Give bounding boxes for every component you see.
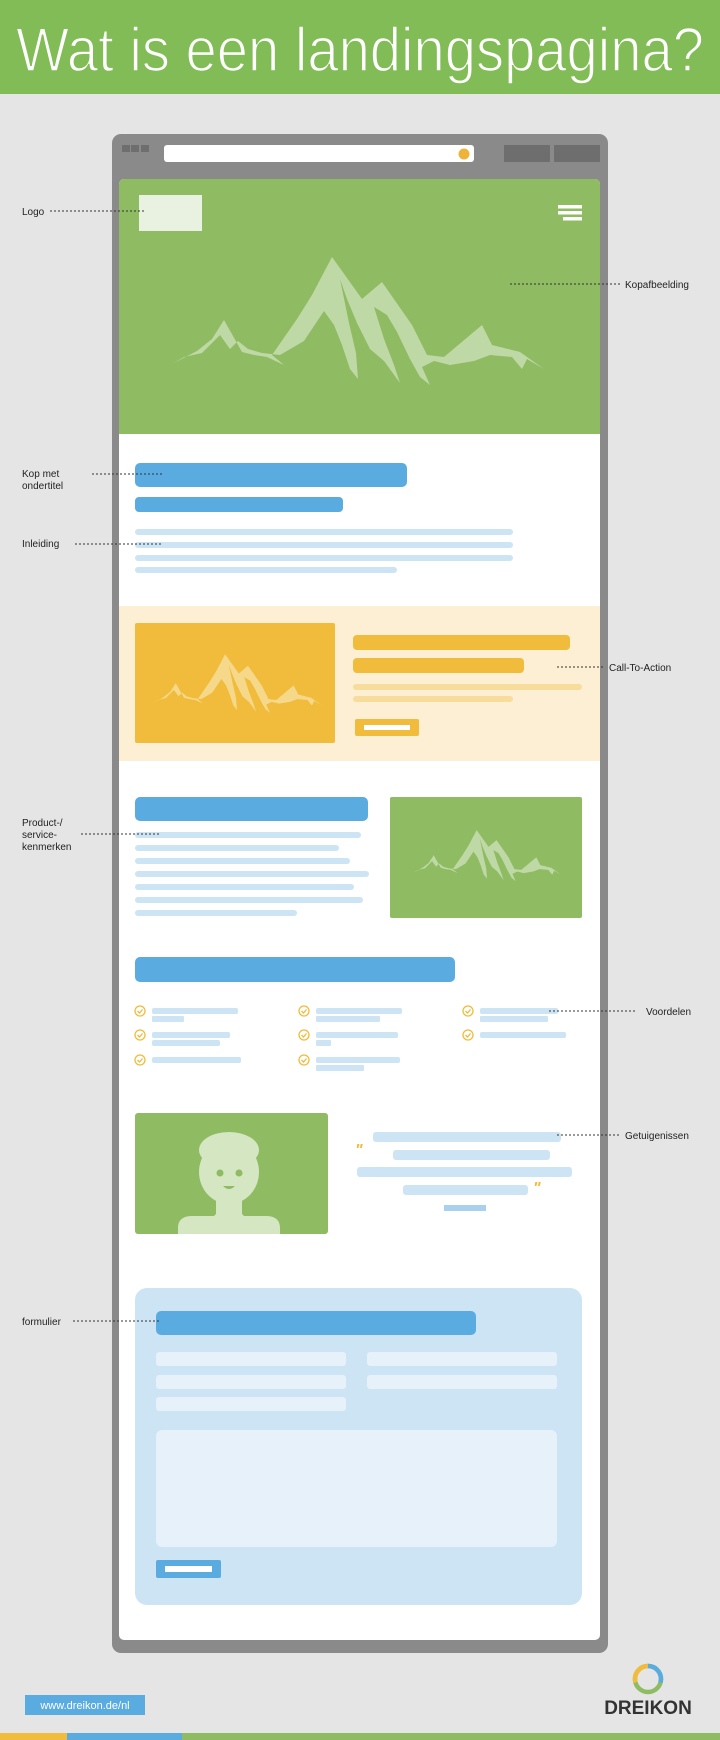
logo box: [139, 195, 202, 231]
label: Product-/service-kenmerken: Product-/: [22, 818, 63, 829]
CTA image: [135, 623, 335, 743]
label: Inleiding: [22, 539, 162, 550]
label: Logo: [22, 207, 145, 218]
product section: [135, 797, 582, 918]
label: Getuigenissen: [557, 1131, 689, 1142]
hero image: [119, 179, 600, 434]
testimonial quote: [355, 1132, 572, 1211]
label: Logo: Logo: [22, 207, 45, 218]
label: Product-/service-kenmerken: service-: [22, 830, 57, 841]
label: Voordelen: Voordelen: [646, 1007, 691, 1018]
label: Product-/service-kenmerken: kenmerken: [22, 842, 71, 853]
benefits heading bar: [135, 957, 455, 982]
label: formulier: [22, 1317, 161, 1328]
label: Kop met ondertitel: ondertitel: [22, 481, 63, 492]
benefits checklist: [135, 1006, 566, 1071]
hamburger menu: [558, 205, 582, 220]
label: Getuigenissen: Getuigenissen: [625, 1131, 689, 1142]
CTA section: [119, 606, 600, 761]
CTA bars: [353, 635, 570, 650]
DREIKON logo: DREIKON: [604, 1698, 692, 1719]
person icon: [178, 1132, 280, 1234]
url badge: [25, 1695, 145, 1715]
intro lines: [135, 529, 513, 573]
header banner: [0, 0, 720, 94]
label: Inleiding: Inleiding: [22, 539, 59, 550]
testimonial quote: ": [355, 1142, 363, 1159]
form panel: [135, 1288, 582, 1605]
label: Product-/service-kenmerken: [22, 818, 160, 853]
DREIKON logo: [604, 1666, 692, 1719]
testimonial image: [135, 1113, 328, 1234]
product image: [390, 797, 582, 918]
heading bars: [135, 463, 407, 512]
testimonial quote: ": [533, 1180, 541, 1197]
browser frame: [112, 134, 608, 1653]
mountain: [172, 257, 544, 385]
bottom color stripe: [0, 1733, 720, 1740]
label: Kopafbeelding: Kopafbeelding: [625, 280, 689, 291]
label: Kop met ondertitel: [22, 469, 162, 492]
browser buttons: [504, 145, 600, 162]
screen: [119, 179, 600, 1640]
url badge: www.dreikon.de/nl: [39, 1700, 130, 1712]
label: Call-To-Action: [557, 663, 671, 674]
label: formulier: formulier: [22, 1317, 62, 1328]
url bar: [164, 145, 474, 162]
window dots: [122, 145, 149, 152]
label: Kop met ondertitel: Kop met: [22, 469, 59, 480]
form button: [156, 1560, 221, 1578]
label: Call-To-Action: Call-To-Action: [609, 663, 671, 674]
CTA button: [355, 719, 419, 736]
